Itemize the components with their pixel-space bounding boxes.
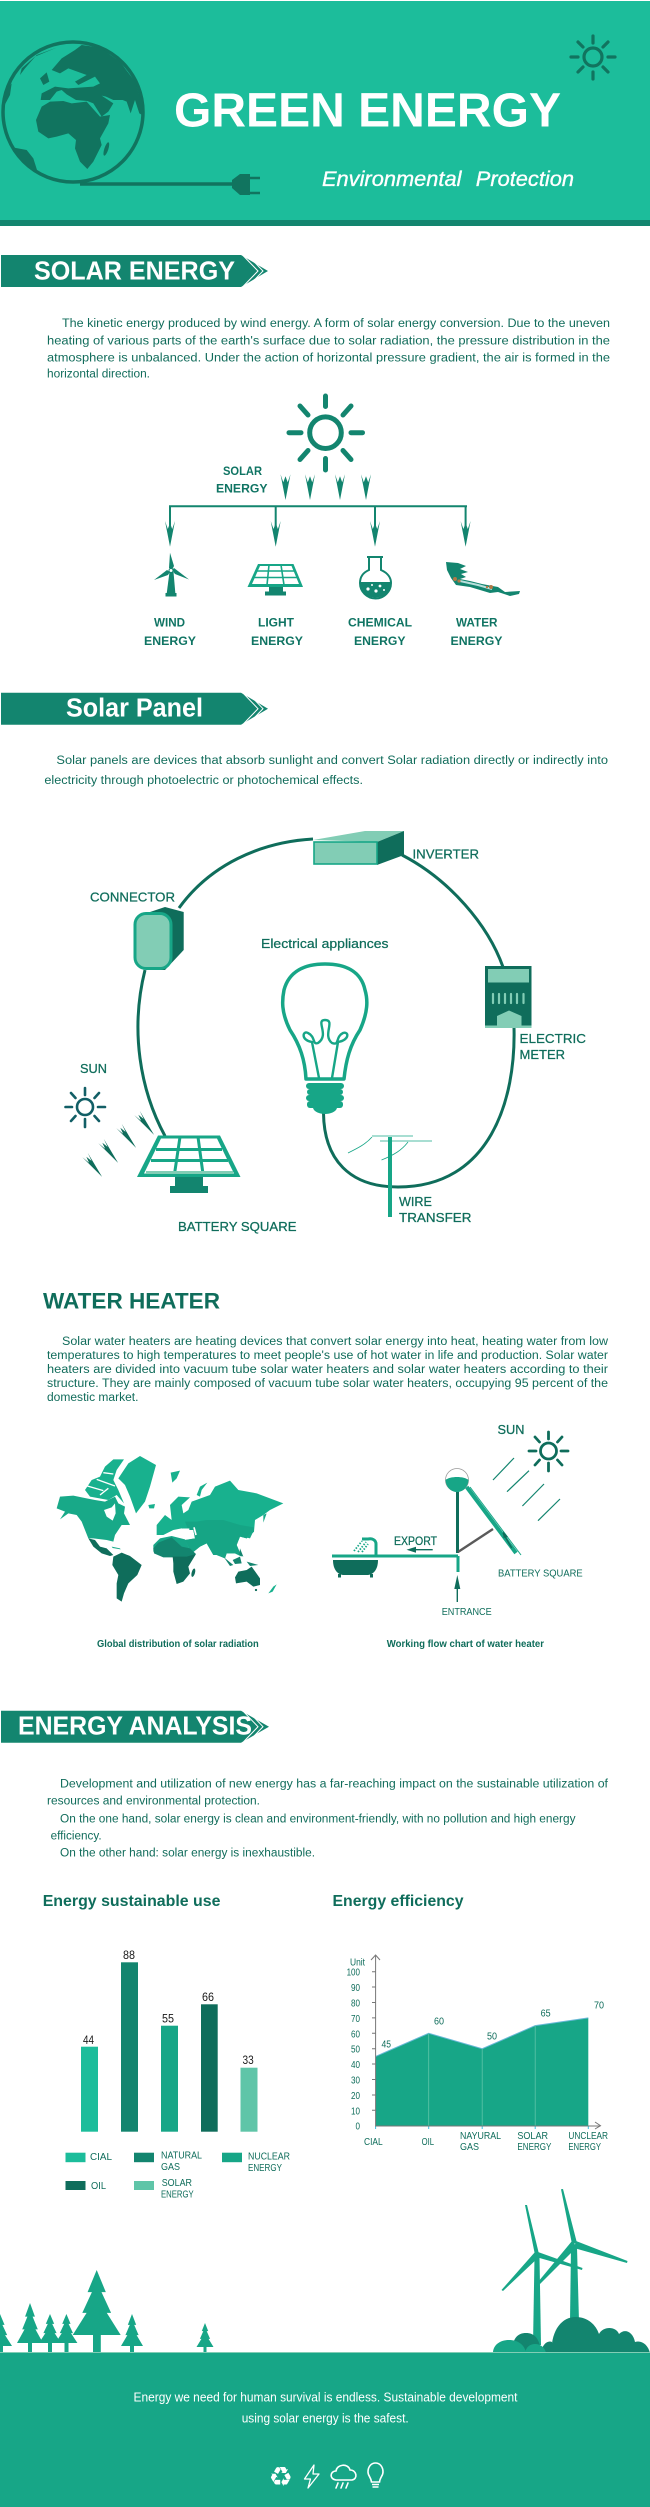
madagascar	[191, 1568, 196, 1577]
subtitle: Environmental Protection	[322, 168, 574, 191]
new zealand	[268, 1584, 277, 1593]
collector and tank	[446, 1468, 521, 1555]
x axis labels: SOLAR	[517, 2130, 548, 2142]
greenland	[118, 1456, 156, 1513]
data labels: 60	[434, 2016, 444, 2027]
diagram: water heater flow	[332, 1422, 583, 1618]
text block: solar energy intro	[47, 318, 610, 380]
bar values: 33	[242, 2053, 254, 2067]
x axis labels: UNCLEAR	[568, 2130, 608, 2142]
legend: bar chart: SOLAR	[162, 2177, 192, 2189]
legend: bar chart: ENERGY	[248, 2162, 282, 2174]
tasmania	[255, 1589, 257, 1591]
icon: wind turbine	[154, 553, 189, 596]
icon: rain cloud	[331, 2465, 356, 2488]
x axis labels: CIAL	[364, 2136, 383, 2148]
icon: solar panel array	[137, 1136, 240, 1193]
label: battery square: BATTERY SQUARE	[178, 1219, 297, 1234]
label: electric meter	[520, 1031, 586, 1062]
caribbean	[112, 1547, 121, 1549]
legend: bar chart: CIAL	[90, 2151, 112, 2163]
labels: energy types: LIGHT	[258, 616, 295, 630]
y axis labels: Unit	[350, 1958, 365, 1969]
text block: water heater intro: temperatures to high temperatures to meet people's use of hot water in life and production. Solar water	[47, 1350, 608, 1362]
southern asia shade	[185, 1520, 254, 1558]
arctic islands	[85, 1459, 124, 1503]
small northern islands	[148, 1471, 207, 1508]
diagram: solar panel circuit	[66, 831, 586, 1234]
wires	[138, 839, 514, 1187]
y axis labels: 80	[351, 1998, 360, 2010]
x axis labels: OIL	[422, 2136, 434, 2148]
heading: water heater: WATER HEATER	[43, 1289, 220, 1314]
data labels: 65	[541, 2009, 551, 2020]
icon: globe with plug	[3, 42, 260, 195]
legend: bar chart: GAS	[161, 2161, 180, 2173]
eurasia	[157, 1481, 283, 1558]
central america	[88, 1538, 113, 1556]
title: GREEN ENERGY	[174, 84, 561, 138]
arrow: export	[406, 1547, 433, 1553]
y axis labels: 60	[351, 2029, 360, 2040]
icon: water	[446, 562, 520, 596]
label: sun: SUN	[80, 1061, 107, 1076]
labels: energy types: WATER	[456, 616, 498, 630]
label: inverter: INVERTER	[412, 846, 479, 861]
south america	[112, 1553, 142, 1602]
labels: energy types: CHEMICAL	[348, 616, 412, 630]
text block: solar energy intro: atmosphere is unbalanced. Under the action of horizontal pressure gradient, the air is formed in the	[47, 352, 610, 364]
indonesia	[224, 1548, 258, 1566]
label: solar energy: ENERGY	[216, 482, 268, 496]
labels: energy types: ENERGY	[450, 634, 502, 648]
x axis labels: ENERGY	[517, 2141, 551, 2153]
label: wire transfer: WIRE	[399, 1194, 432, 1209]
bar values: 44	[83, 2033, 94, 2047]
y axis labels: 30	[351, 2076, 360, 2086]
bar values: 88	[123, 1948, 135, 1962]
bar chart: energy sustainable use	[81, 1948, 258, 2132]
arrows: branches	[165, 506, 471, 547]
icon: small bulb	[368, 2463, 383, 2487]
banner: solar energy: SOLAR ENERGY	[34, 257, 235, 285]
label: connector: CONNECTOR	[90, 890, 175, 905]
banner: energy analysis: ENERGY ANALYSIS	[18, 1713, 252, 1741]
label: electric meter: ELECTRIC	[520, 1031, 586, 1046]
data labels: 45	[382, 2040, 391, 2051]
sun rays	[493, 1458, 560, 1521]
label: export: EXPORT	[394, 1534, 438, 1548]
labels: energy types: ENERGY	[251, 634, 303, 648]
icon: sun	[571, 36, 615, 79]
banner: solar panel: Solar Panel	[66, 695, 203, 723]
data labels: 70	[594, 2001, 604, 2012]
arrow: entrance	[454, 1575, 460, 1602]
caption: flow chart: Working flow chart of water heater	[387, 1638, 544, 1650]
y axis labels: 0	[356, 2122, 360, 2133]
icon: large sun	[289, 396, 362, 470]
y axis labels: 100	[347, 1968, 360, 1979]
x axis labels: NAYURAL	[460, 2130, 501, 2142]
x axis labels	[364, 2130, 608, 2153]
diagram: solar energy conversion	[144, 396, 520, 648]
banner: solar energy	[1, 255, 268, 287]
inland seas	[183, 1527, 196, 1535]
text block: water heater intro: heaters are divided into vacuum tube solar water heaters and solar water heaters according to their	[47, 1364, 608, 1376]
icon: bathtub and shower	[332, 1539, 458, 1578]
banner: solar panel	[1, 693, 268, 725]
legend: bar chart: NATURAL	[161, 2149, 202, 2161]
text block: energy analysis intro: efficiency.	[51, 1831, 102, 1843]
bar values: 66	[202, 1990, 214, 2004]
y axis labels: 90	[351, 1983, 360, 1994]
text block: solar energy intro: heating of various parts of the earth's surface due to solar radiation, the pressure distribution in the	[47, 335, 610, 347]
y axis labels: 40	[351, 2060, 360, 2071]
icon: connector	[135, 907, 184, 970]
arrows: sunlight	[280, 474, 371, 500]
label: wire transfer	[399, 1194, 472, 1225]
heading: energy sustainable use: Energy sustainable use	[43, 1893, 221, 1910]
label: electrical appliances: Electrical appliances	[261, 936, 389, 951]
x axis labels: GAS	[460, 2141, 479, 2153]
map: world solar radiation	[57, 1456, 283, 1602]
north america	[57, 1496, 130, 1542]
text block: solar energy intro: horizontal direction.	[47, 368, 150, 380]
icon: electric meter	[485, 966, 532, 1028]
text block: energy analysis intro: Development and utilization of new energy has a far-reaching impact on the sustainable utilization of	[60, 1779, 609, 1791]
text block: water heater intro	[47, 1336, 609, 1404]
text block: water heater intro: Solar water heaters are heating devices that convert solar energy into heat, heating water from low	[62, 1336, 609, 1348]
text block: solar panel intro: electricity through photoelectric or photochemical effects.	[44, 775, 363, 787]
text block: solar panel intro: Solar panels are devices that absorb sunlight and convert Solar radiation directly or indirectly into	[56, 755, 608, 767]
arrows: sun rays to panel	[82, 1111, 157, 1179]
footer text	[134, 2391, 518, 2426]
text block: energy analysis intro: resources and environmental protection.	[47, 1796, 260, 1808]
data labels: 50	[487, 2031, 497, 2042]
y axis labels: 70	[351, 2014, 360, 2025]
japan and asian islands	[246, 1513, 267, 1538]
panel: header	[0, 1, 650, 226]
label: sun: SUN	[498, 1422, 524, 1437]
icon: light bulb	[283, 964, 367, 1114]
labels: energy types: ENERGY	[354, 634, 406, 648]
label: wire transfer: TRANSFER	[399, 1210, 472, 1225]
label: entrance: ENTRANCE	[442, 1606, 492, 1618]
legend: bar chart: OIL	[91, 2180, 106, 2192]
y axis labels: 50	[351, 2045, 360, 2056]
y axis labels	[347, 1958, 365, 2133]
legend: bar chart: NUCLEAR	[248, 2150, 290, 2162]
label: electric meter: METER	[520, 1047, 565, 1062]
heading: energy efficiency: Energy efficiency	[332, 1893, 464, 1910]
icon: flask	[360, 557, 391, 598]
scene: wind turbines	[502, 2189, 628, 2345]
africa north	[153, 1536, 190, 1553]
text block: energy analysis intro: On the other hand: solar energy is inexhaustible.	[60, 1848, 315, 1860]
text block: solar panel intro	[44, 755, 608, 787]
text block: energy analysis intro: On the one hand, solar energy is clean and environment-friendly, with no pollution and high energy	[60, 1814, 576, 1826]
footer text: Energy we need for human survival is endless. Sustainable development	[134, 2391, 518, 2405]
y axis labels: 20	[351, 2091, 360, 2102]
icon: lightning bolt	[304, 2465, 319, 2488]
panel: footer	[0, 2352, 650, 2507]
y axis labels: 10	[351, 2106, 360, 2117]
label: solar energy: SOLAR	[223, 464, 262, 478]
scene: trees	[0, 2270, 214, 2354]
icon: recycle: ♻	[269, 2462, 293, 2493]
caption: map: Global distribution of solar radiation	[97, 1638, 259, 1650]
text block: water heater intro: structure. They are mainly composed of vacuum tube solar water heaters, occupying 95 percent of the	[47, 1378, 608, 1390]
icon: sun	[529, 1432, 568, 1471]
australia	[235, 1567, 260, 1587]
hudson bay	[104, 1503, 116, 1521]
x axis labels: ENERGY	[568, 2141, 601, 2153]
text block: water heater intro: domestic market.	[47, 1392, 138, 1404]
africa south	[173, 1554, 196, 1584]
labels: energy types: ENERGY	[144, 634, 196, 648]
data labels	[382, 2001, 604, 2051]
bar values: 55	[162, 2011, 174, 2025]
legend: bar chart	[66, 2149, 290, 2201]
icon: small sun	[66, 1088, 105, 1127]
icon: transmission pole	[348, 1136, 432, 1217]
text block: solar energy intro: The kinetic energy produced by wind energy. A form of solar energy conversion. Due to the uneven	[62, 318, 610, 330]
icon: solar panel	[248, 564, 303, 596]
labels: energy types	[144, 616, 502, 648]
africa sahel	[153, 1537, 196, 1558]
bar values	[83, 1948, 254, 2067]
scene: bushes	[493, 2317, 650, 2353]
icon: inverter	[313, 831, 404, 865]
area chart: energy efficiency	[347, 1955, 608, 2153]
arctic channels	[87, 1473, 115, 1495]
footer text: using solar energy is the safest.	[242, 2412, 409, 2426]
legend: bar chart: ENERGY	[161, 2189, 194, 2201]
label: solar energy	[216, 464, 268, 496]
text block: energy analysis intro	[47, 1779, 609, 1860]
label: battery square: BATTERY SQUARE	[498, 1568, 583, 1580]
labels: energy types: WIND	[154, 616, 185, 630]
